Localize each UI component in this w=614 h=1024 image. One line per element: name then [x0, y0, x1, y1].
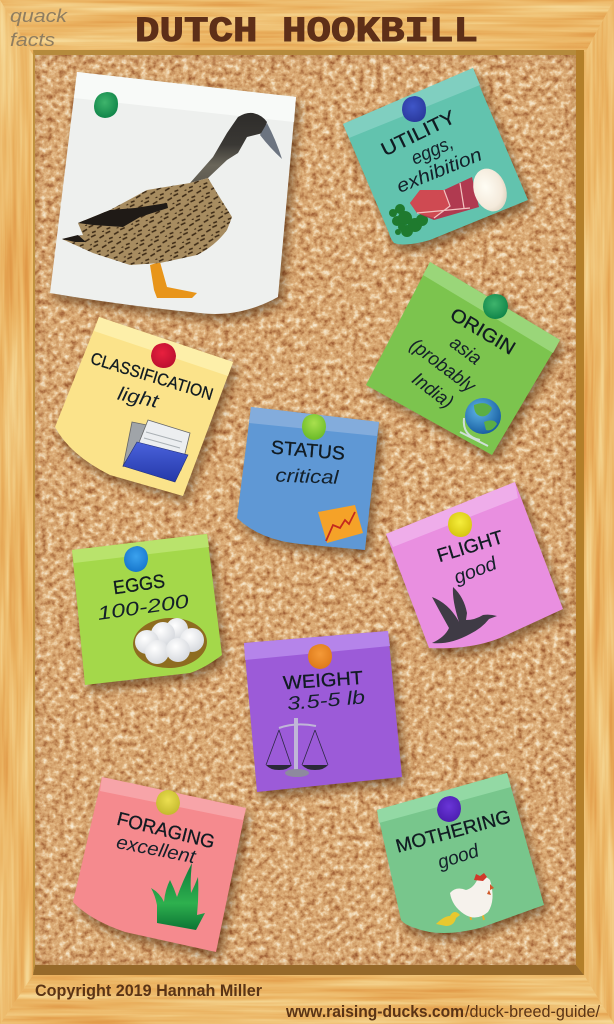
icon: nest of eggs [132, 616, 208, 670]
panel: classification note [55, 317, 233, 496]
icon: hookbill duck [62, 113, 282, 298]
value: excellent: excellent [115, 832, 198, 868]
title: DUTCH HOOKBILL [135, 12, 478, 52]
heading: utility: UTILITY [378, 107, 459, 161]
icon: balance scales [266, 718, 328, 777]
value: critical: critical [275, 466, 340, 489]
icon: flying duck [432, 587, 497, 643]
icon: folder [123, 420, 190, 482]
copyright: Copyright 2019 Hannah Miller [35, 981, 262, 1000]
value: india: India) [408, 369, 457, 413]
icon: globe [460, 398, 501, 446]
value: exhibition: exhibition [394, 144, 485, 198]
value: probably: (probably [406, 335, 480, 398]
heading: mothering: MOTHERING [394, 807, 513, 858]
pin: olive yellow [156, 790, 180, 815]
pin: orange [308, 644, 332, 669]
value: light: light [116, 384, 161, 413]
panel: duck photo note [50, 72, 296, 314]
icon: meat, egg and parsley [389, 164, 513, 237]
panel: weight note [244, 631, 402, 792]
panel: flight note [386, 482, 563, 648]
panel: utility note [343, 68, 528, 244]
pin: blue [402, 96, 426, 122]
heading: classification: CLASSIFICATION [88, 349, 215, 404]
panel: status note [237, 407, 379, 550]
icon: rising chart [318, 505, 363, 543]
quack facts label [10, 6, 68, 50]
value: good: good [435, 840, 483, 874]
pin: blue [124, 546, 148, 572]
pin: green [94, 92, 118, 118]
pin: purple [437, 796, 461, 822]
panel: origin note [366, 262, 560, 455]
heading: status: STATUS [270, 437, 346, 465]
heading: flight: FLIGHT [435, 527, 506, 567]
panel: eggs note [72, 534, 222, 685]
value: 100-200: 100-200 [96, 591, 191, 625]
quack facts label: facts [10, 30, 55, 50]
heading: eggs: EGGS [112, 571, 166, 599]
pin: yellow [448, 512, 472, 537]
heading: weight: WEIGHT [282, 668, 364, 694]
value: eggs: eggs, [408, 133, 457, 170]
value: good: good [451, 553, 501, 589]
pin: green [483, 294, 508, 319]
icon: grass [151, 863, 205, 930]
pin: lime [302, 414, 326, 440]
heading: origin: ORIGIN [446, 304, 519, 360]
source url: /duck-breed-guide/ [465, 1002, 600, 1021]
panel: foraging note [73, 777, 246, 952]
panel: mothering note [377, 773, 544, 933]
value: weight range: 3.5-5 lb [286, 687, 366, 715]
source url [285, 1002, 600, 1021]
pin: red [151, 343, 176, 368]
quack facts label: quack [10, 6, 68, 26]
value: asia: asia [445, 332, 485, 370]
source url: www.raising-ducks.com [285, 1002, 464, 1021]
heading: foraging: FORAGING [115, 809, 217, 853]
icon: hen and chick [436, 873, 494, 926]
